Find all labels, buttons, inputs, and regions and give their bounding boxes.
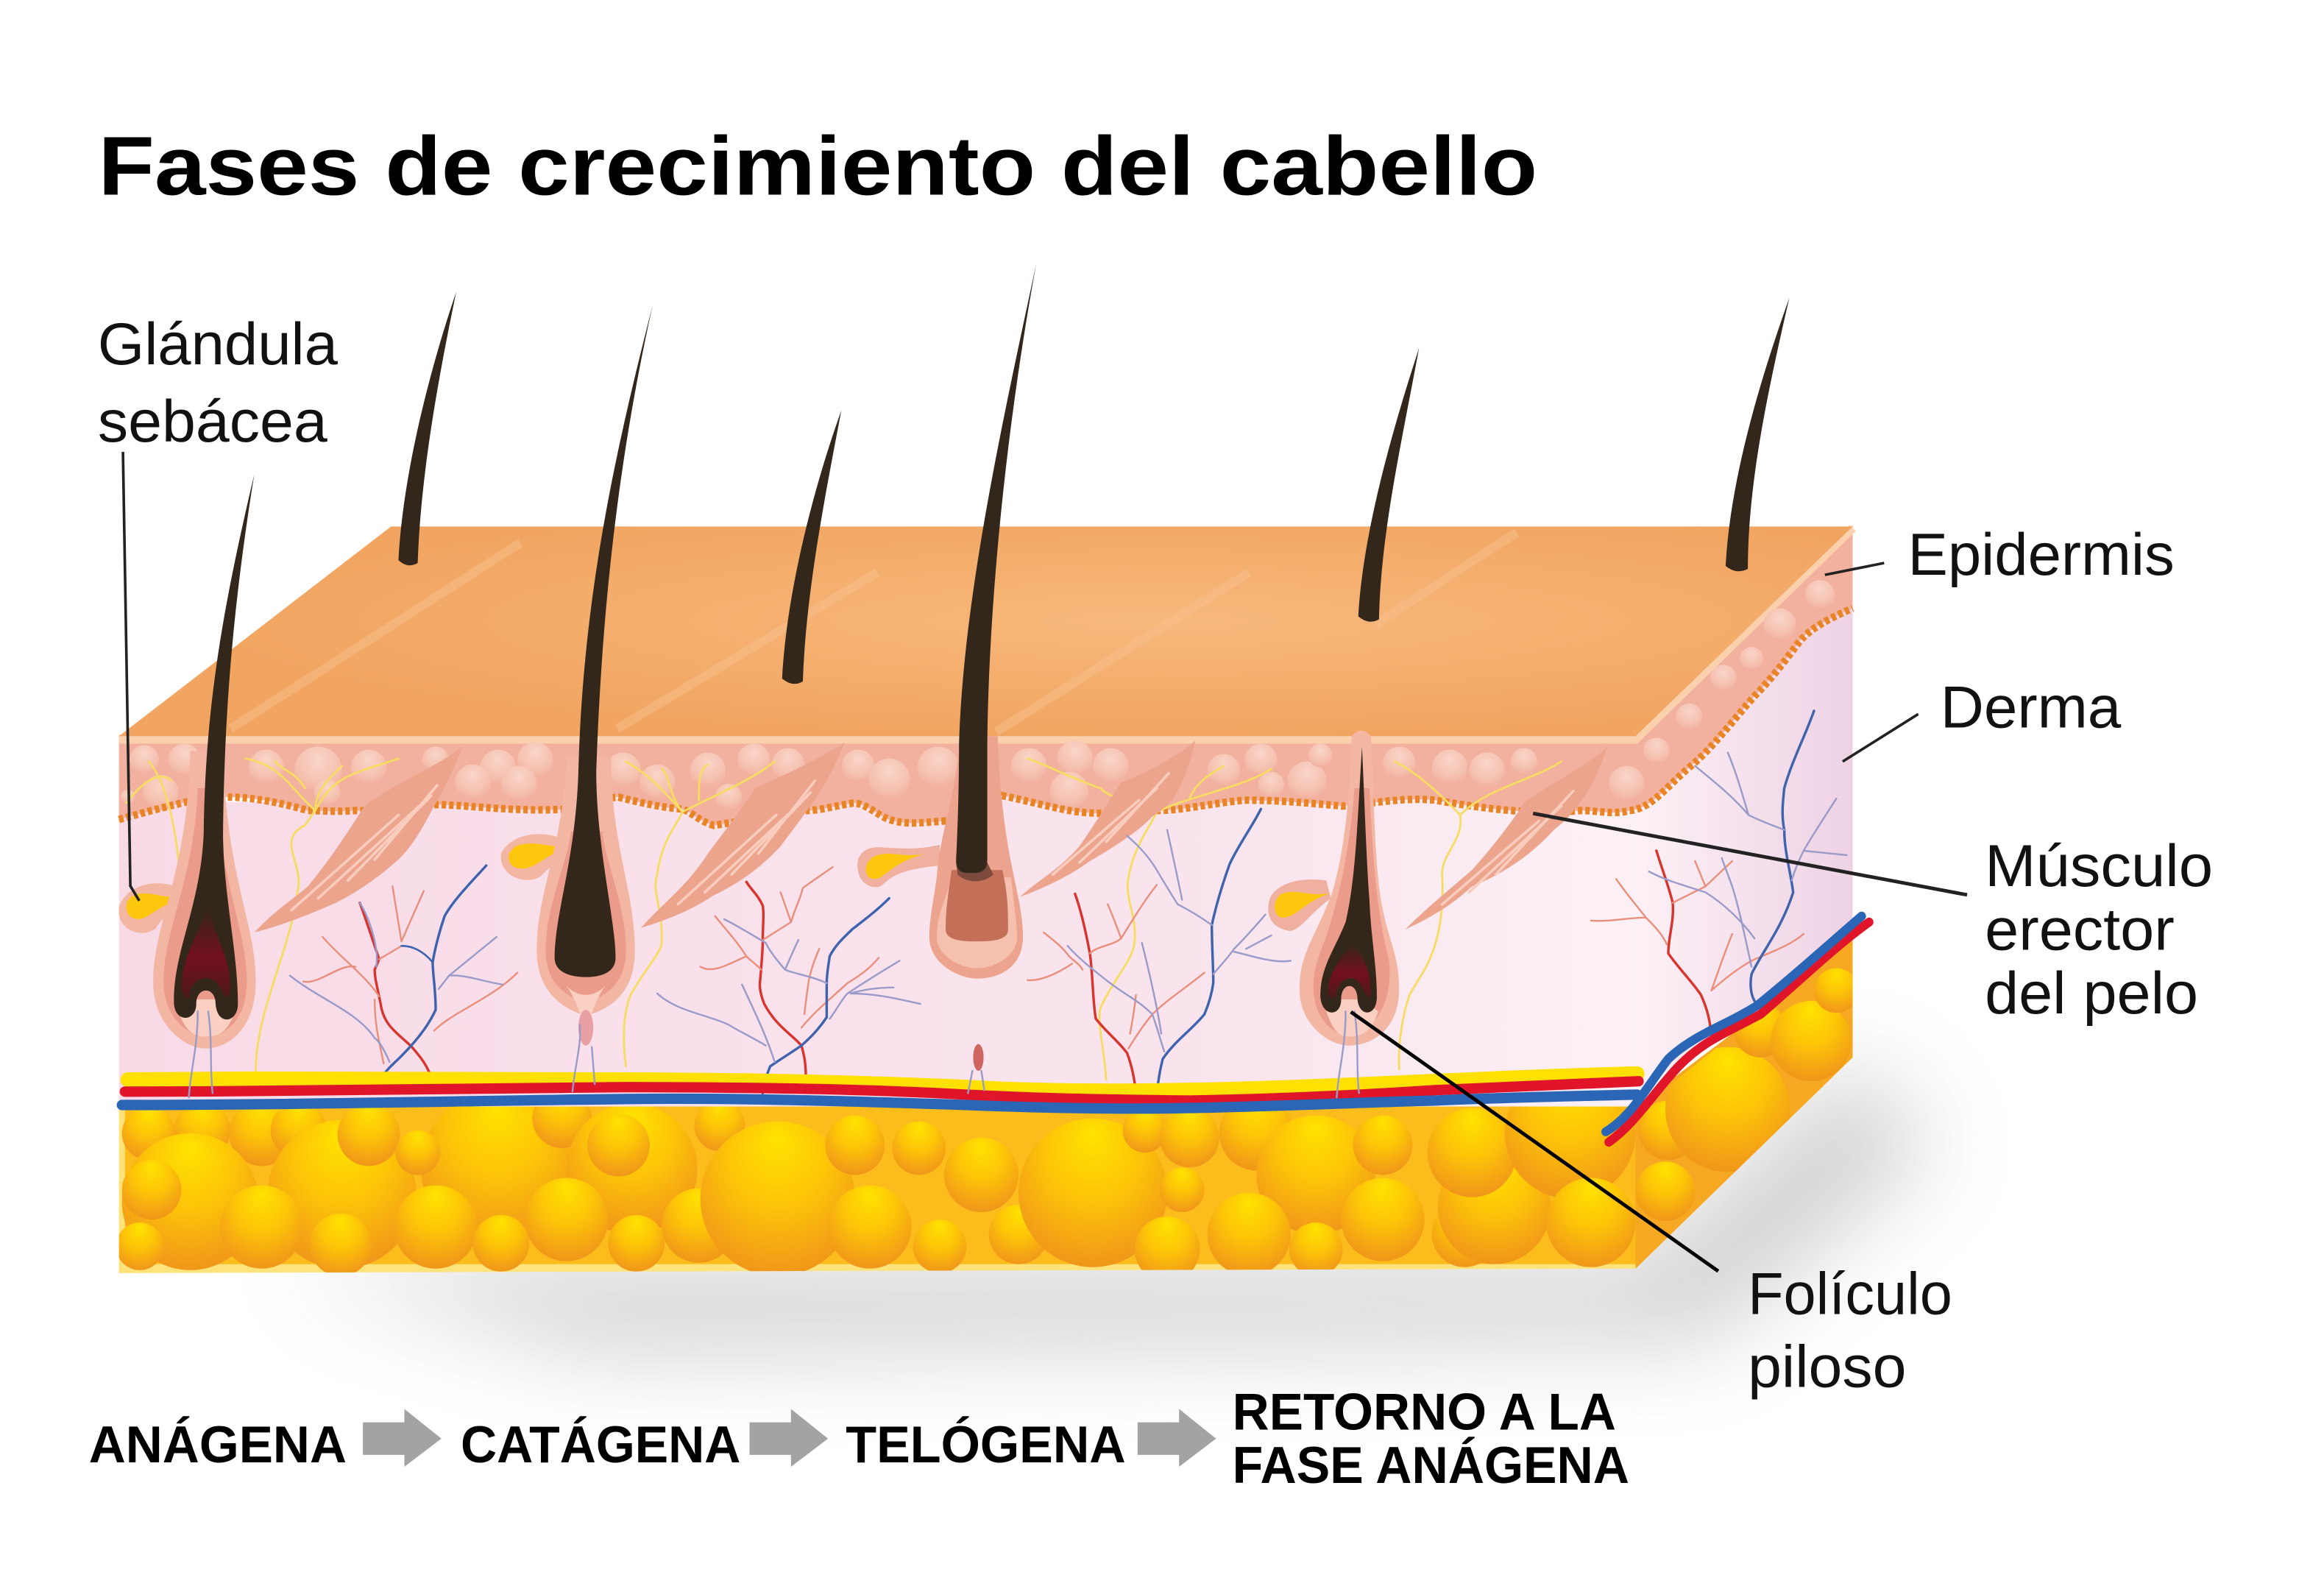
panel: telogen follicle with gland (857, 263, 1036, 1093)
drop shadow under skin block (283, 1063, 1933, 1350)
arrow (749, 1409, 828, 1467)
callout: Derma (1843, 674, 2122, 762)
callout: Músculo erector del pelo: erector (1985, 896, 2175, 963)
callout: Músculo erector del pelo: del pelo (1985, 960, 2198, 1027)
icon: sebaceous gland (118, 883, 191, 933)
callout: Folículo piloso (1351, 1012, 1952, 1400)
icon: sebaceous gland (501, 834, 575, 880)
callout: Glándula sebácea: sebácea (98, 389, 327, 455)
arrow (363, 1409, 442, 1467)
callout: Epidermis: Epidermis (1907, 522, 2175, 588)
text: Retorno a la fase anágena: RETORNO A LA (1233, 1383, 1616, 1441)
phase flow row (89, 1383, 1629, 1494)
title: Fases de crecimiento del cabello (98, 120, 1537, 213)
callout: Glándula sebácea: Glándula (98, 311, 338, 378)
text: Catágena: CATÁGENA (461, 1415, 740, 1473)
icon: sebaceous gland (857, 845, 940, 887)
panel: anagen follicle with gland (118, 475, 256, 1097)
icon: horizontal blood vessels and nerve (122, 1074, 1639, 1108)
panel: erector muscles (255, 740, 1607, 932)
skin block illustration (116, 263, 1869, 1282)
icon: sensory nerve network (127, 759, 1561, 1080)
icon: hair shafts above the surface (398, 292, 1789, 684)
callout: Músculo erector del pelo: Músculo (1985, 833, 2213, 899)
callout: Folículo piloso: Folículo (1748, 1261, 1952, 1328)
arrow (1138, 1409, 1216, 1467)
icon: capillary network D (1591, 711, 1846, 1037)
panel: catagen follicle with gland (501, 305, 653, 1091)
panel: skin top surface (119, 526, 1853, 736)
icon: capillary network A (290, 865, 517, 1086)
icon: sebaceous gland (1268, 879, 1332, 931)
text: Telógena: TELÓGENA (846, 1415, 1126, 1473)
callout: Derma: Derma (1941, 674, 2122, 740)
icon: capillary network C (1027, 809, 1291, 1103)
panel: epidermis layer (119, 525, 1853, 826)
callout: Músculo erector del pelo (1533, 813, 2213, 1027)
callout: Folículo piloso: piloso (1748, 1334, 1906, 1400)
callout: Glándula sebácea (98, 311, 338, 901)
panel: dermis layer (119, 595, 1853, 1106)
text: Anágena: ANÁGENA (89, 1415, 347, 1473)
panel: hypodermis fat layer (116, 937, 1859, 1282)
icon: capillary network B (657, 867, 921, 1093)
panel: new anagen follicle with gland (1268, 731, 1399, 1097)
text: Retorno a la fase anágena (1233, 1383, 1629, 1494)
text: Retorno a la fase anágena: FASE ANÁGENA (1233, 1436, 1629, 1494)
icon: rising vessels on right face (1606, 916, 1869, 1142)
